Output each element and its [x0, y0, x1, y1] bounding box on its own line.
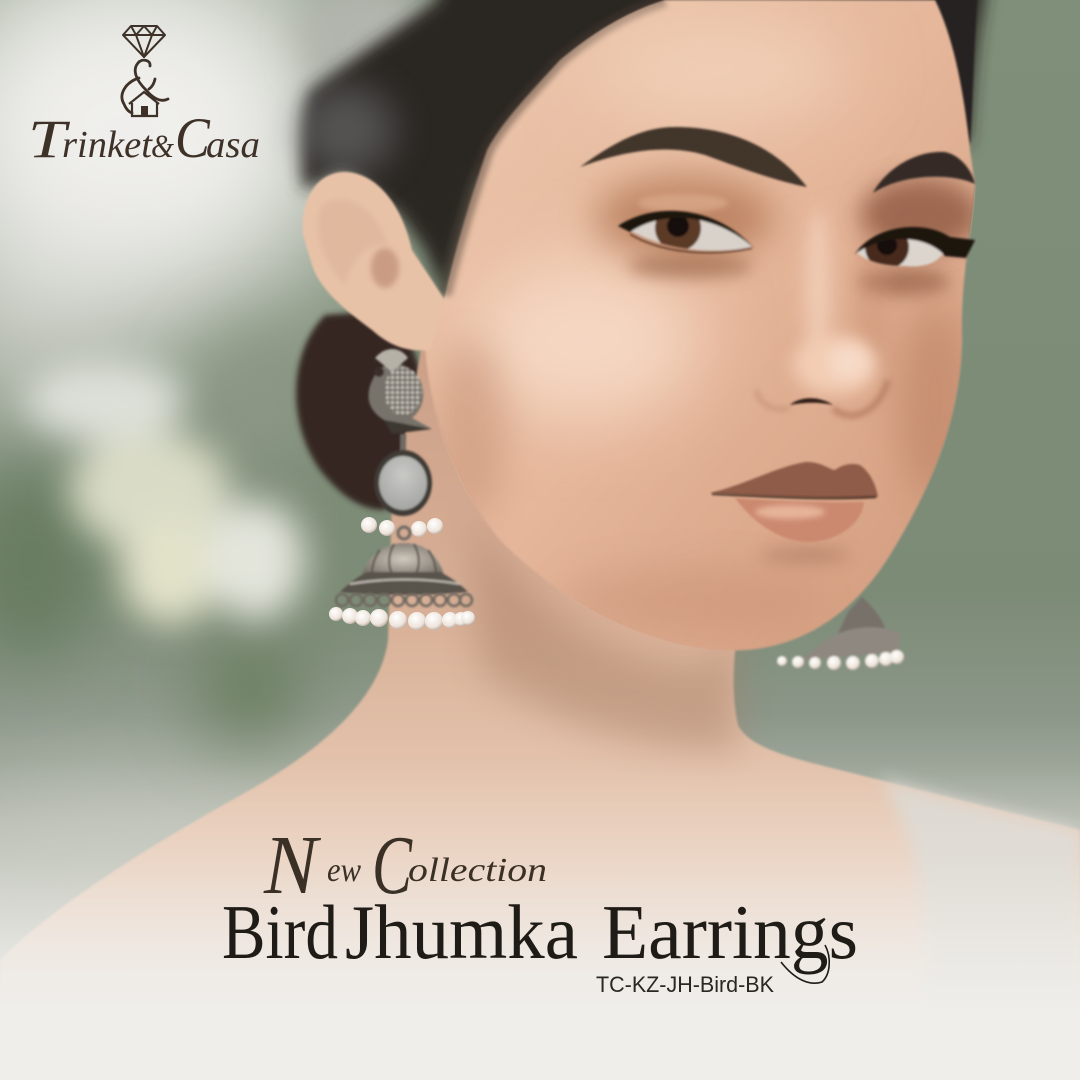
grey soft hair highlight: [295, 85, 395, 175]
logo wordmark: &: [151, 129, 174, 165]
face: [425, 0, 975, 650]
title: Bird Jhumka Earrings: [222, 889, 858, 975]
hair bun: [296, 310, 430, 510]
left eye: [618, 205, 754, 253]
inner ear shadow: [318, 199, 399, 288]
icon: ampersand: [122, 60, 168, 113]
oval stone: [374, 434, 432, 516]
left eyebrow: [580, 127, 807, 187]
upper lip: [710, 462, 878, 498]
lower lip: [735, 498, 864, 542]
peacock stud: [368, 349, 432, 434]
title: Bird Jhumka Earrings: Jhumka: [345, 889, 578, 975]
right hair sliver: [925, 0, 978, 145]
right eye: [855, 225, 975, 269]
icon: house door: [141, 106, 148, 116]
heading script: New Collection: N: [263, 818, 322, 911]
dress: [880, 778, 1080, 1040]
logo wordmark: T: [28, 110, 70, 169]
logo wordmark: [28, 106, 260, 170]
logo wordmark: rinket: [62, 124, 153, 166]
icon: diamond: [123, 26, 165, 57]
far earring: [777, 597, 904, 670]
product code: TC-KZ-JH-Bird-BK: [596, 972, 774, 997]
jhumka dome: [340, 527, 468, 595]
icon: house: [129, 92, 159, 116]
pearl fringe: [329, 607, 475, 630]
ear: [303, 172, 445, 350]
heading script: New Collection: ollection: [408, 852, 547, 889]
small pearls: [361, 517, 443, 537]
hair: [301, 0, 985, 295]
hairline wisps: [445, 0, 665, 295]
title: Bird Jhumka Earrings: Earrings: [602, 889, 858, 975]
right eyebrow: [873, 152, 975, 193]
nostril: [790, 398, 833, 405]
heading script: New Collection: C: [372, 818, 413, 911]
lip parting line: [712, 494, 876, 498]
heading script: New Collection: [263, 818, 547, 911]
title swash under g: [781, 945, 829, 983]
heading script: New Collection: ew: [327, 852, 361, 889]
title: Bird Jhumka Earrings: Bird: [222, 889, 338, 975]
logo wordmark: C: [175, 106, 211, 170]
logo: Trinket&Casa: [28, 26, 260, 170]
fringe loops: [336, 594, 472, 606]
face shading and highlights: [435, 20, 980, 635]
neck and chest: [0, 330, 1080, 1040]
bottom white fade: [0, 760, 1080, 1080]
near earring: [329, 349, 475, 630]
jaw shadow on neck: [470, 510, 738, 750]
logo wordmark: asa: [206, 124, 260, 166]
